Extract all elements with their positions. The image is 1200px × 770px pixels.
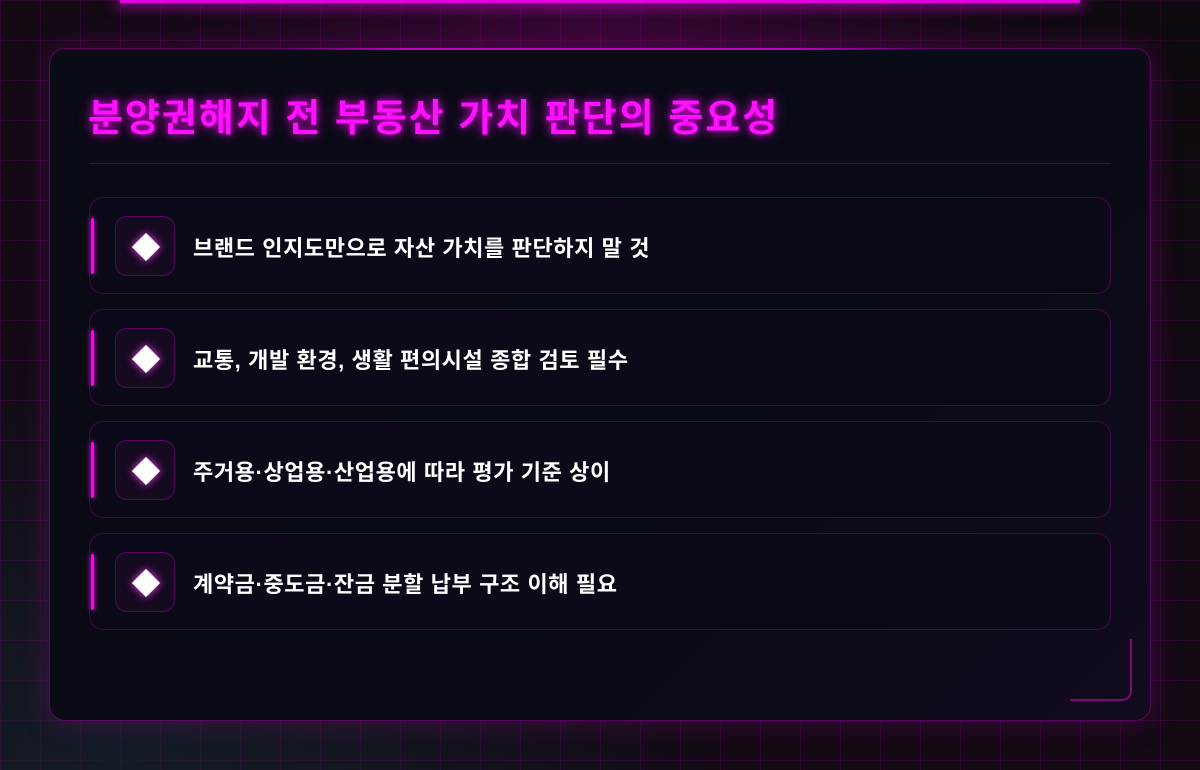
- corner bracket: [1070, 639, 1132, 701]
- item 3: [89, 421, 1111, 518]
- item 3: 주거용·상업용·산업용에 따라 평가 기준 상이: [193, 460, 611, 485]
- item 1: 브랜드 인지도만으로 자산 가치를 판단하지 말 것: [193, 236, 650, 261]
- item 2: [89, 309, 1111, 406]
- item 1: [89, 197, 1111, 294]
- item 4: 계약금·중도금·잔금 분할 납부 구조 이해 필요: [193, 572, 618, 597]
- item 2: 교통, 개발 환경, 생활 편의시설 종합 검토 필수: [193, 348, 629, 373]
- title: 분양권해지 전 부동산 가치 판단의 중요성: [88, 98, 779, 140]
- item 4: [89, 533, 1111, 630]
